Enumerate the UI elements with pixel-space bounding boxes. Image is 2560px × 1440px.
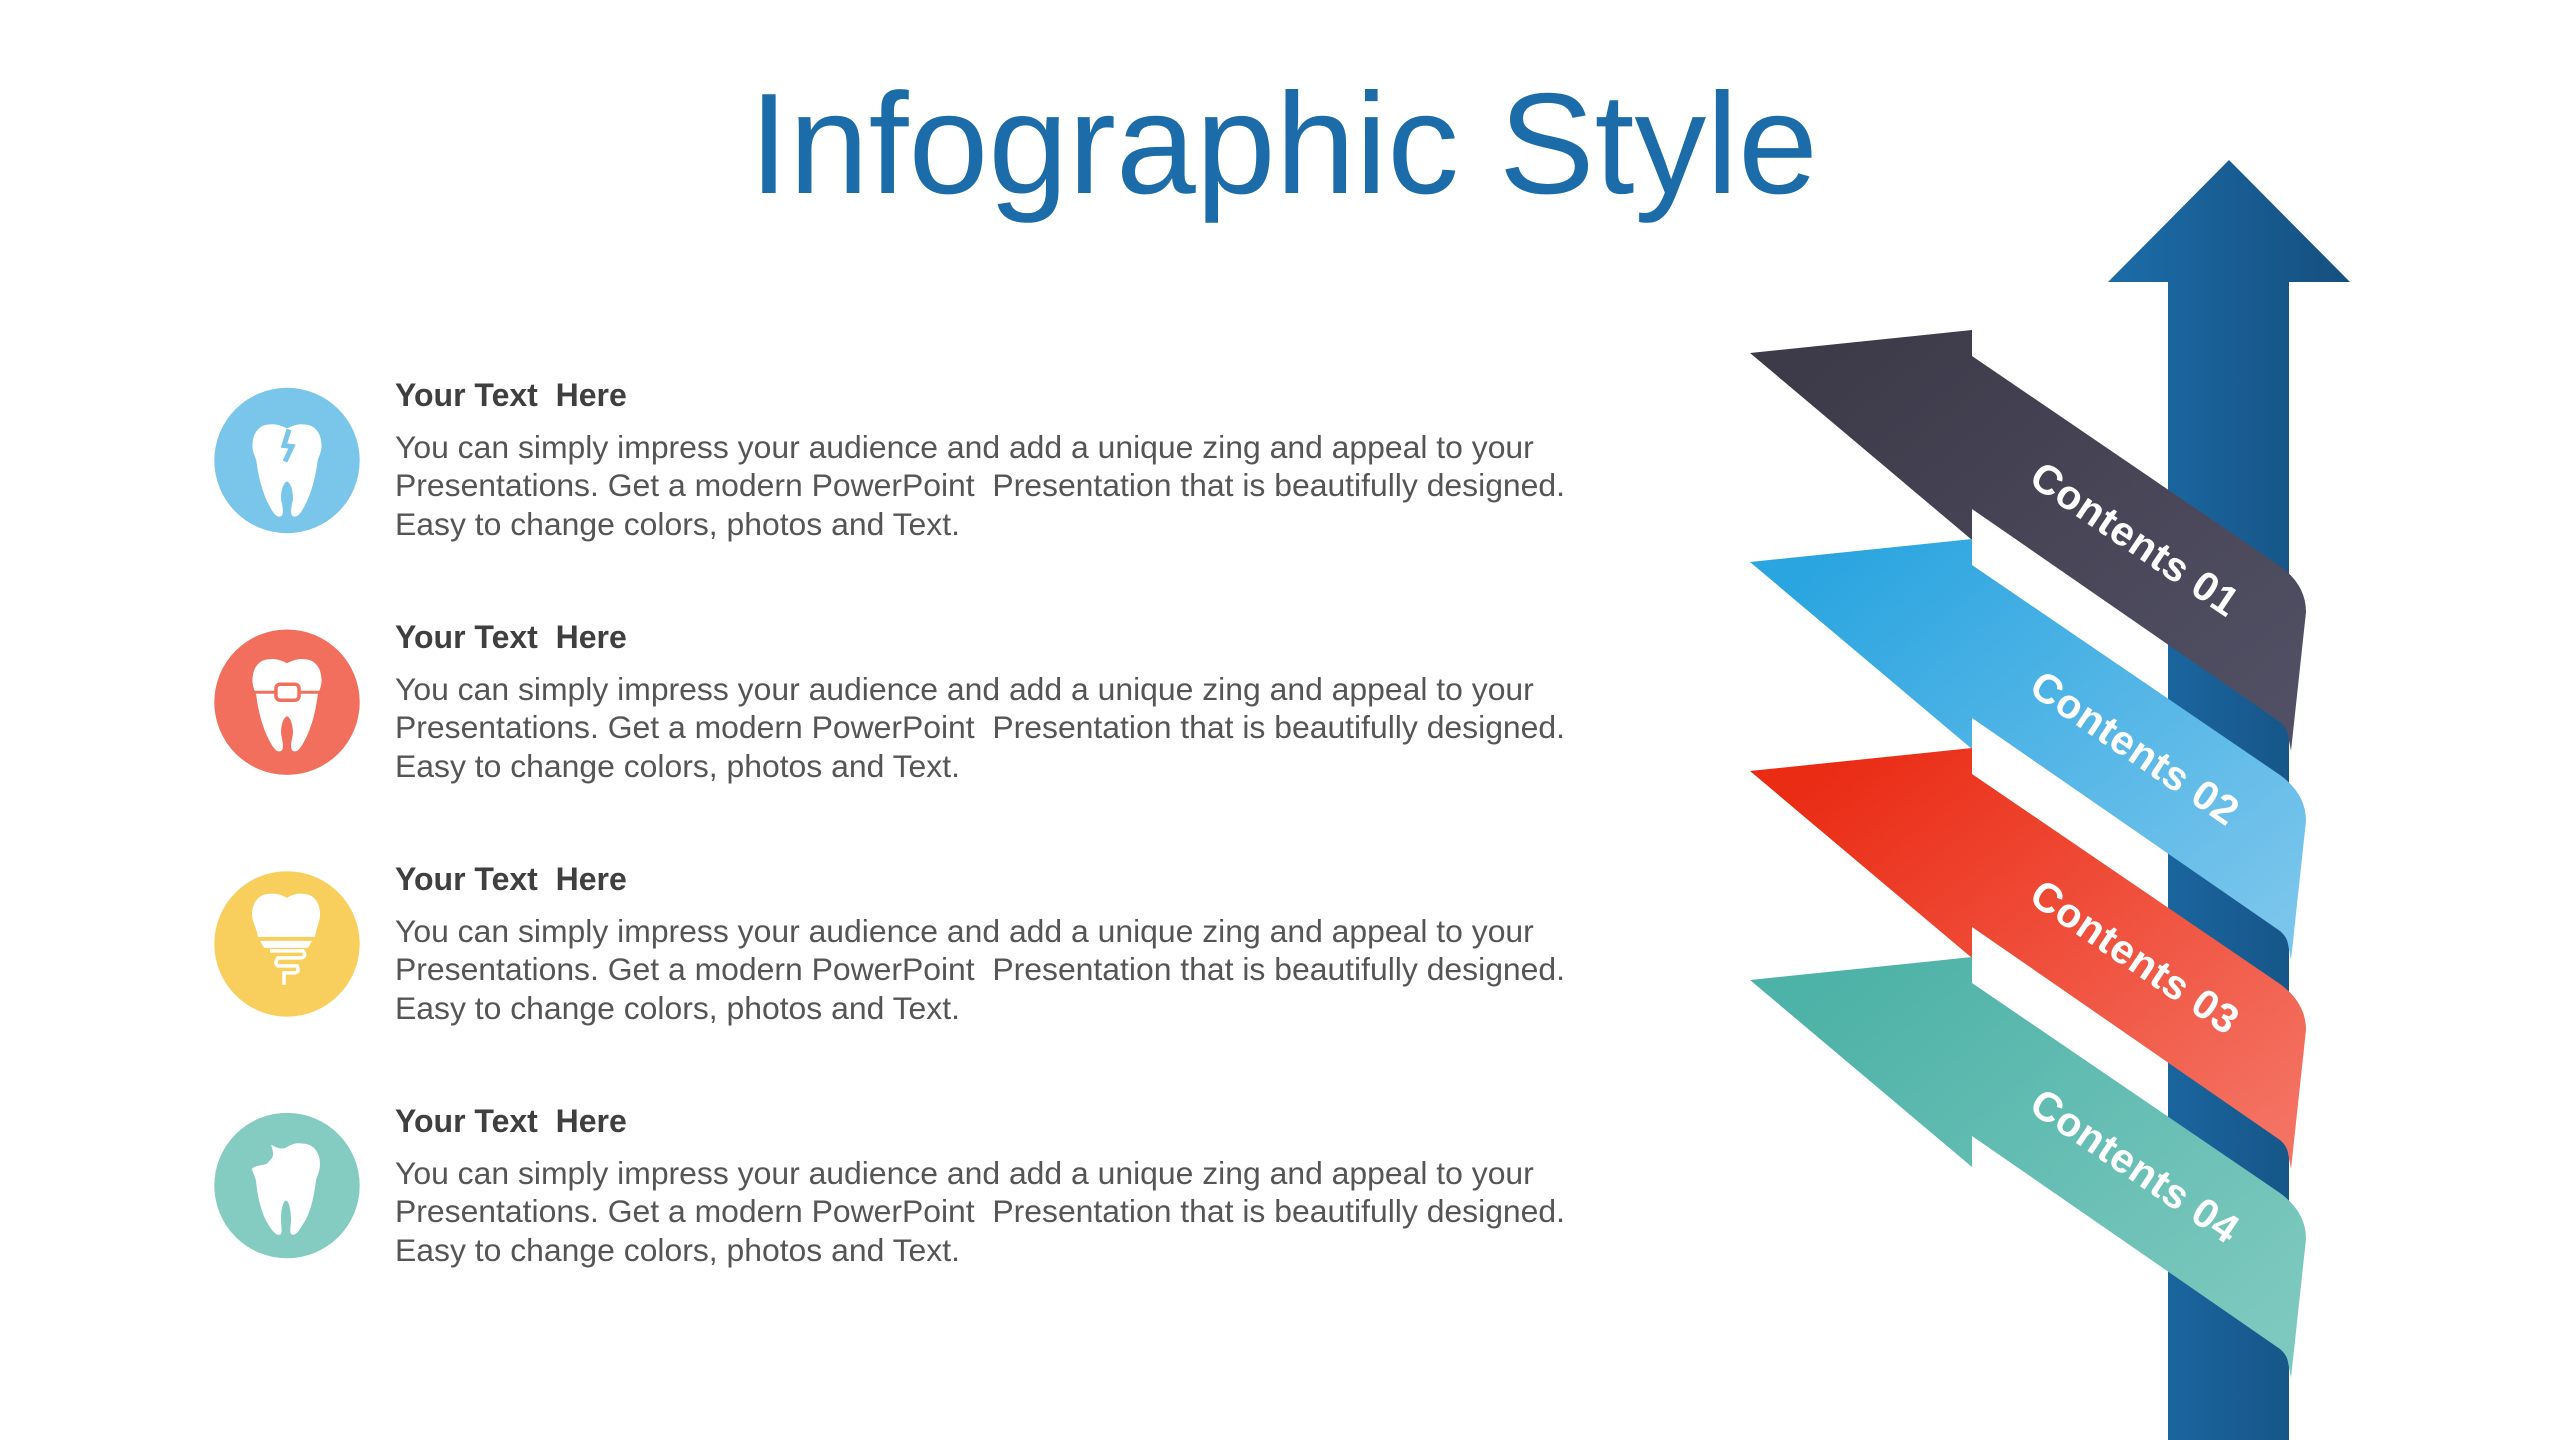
- text block 1: You can simply impress your audience and add a unique zing and appeal to your Presentations. Get a modern PowerPoint Presentation that is beautifully designed. Easy to change colors, photos and Text.: [395, 428, 1565, 542]
- icon: dental implant: [214, 871, 360, 1017]
- ribbon arrow: Contents 01: Contents 01: [2022, 452, 2248, 626]
- text block 1: [395, 377, 1565, 542]
- arrow: main upward arrow: [2108, 160, 2350, 1440]
- title: Infographic Style: [749, 64, 1818, 224]
- text block 1: Your Text Here: [395, 377, 627, 413]
- text block 2: You can simply impress your audience and add a unique zing and appeal to your Presentations. Get a modern PowerPoint Presentation that is beautifully designed. Easy to change colors, photos and Text.: [395, 670, 1565, 784]
- text block 4: Your Text Here: [395, 1103, 627, 1139]
- text block 3: [395, 861, 1565, 1026]
- ribbon arrow: Contents 02: Contents 02: [2022, 661, 2248, 835]
- text block 3: Your Text Here: [395, 861, 627, 897]
- icon: tooth with brace: [214, 630, 360, 775]
- ribbon arrow: Contents 03: [1750, 748, 2306, 1169]
- ribbon arrow: Contents 03: Contents 03: [2022, 870, 2248, 1044]
- text block 2: Your Text Here: [395, 619, 627, 655]
- ribbon arrow: Contents 01: [1750, 330, 2306, 751]
- text block 4: You can simply impress your audience and add a unique zing and appeal to your Presentations. Get a modern PowerPoint Presentation that is beautifully designed. Easy to change colors, photos and Text.: [395, 1154, 1565, 1268]
- text block 2: [395, 619, 1565, 784]
- ribbon arrow: Contents 04: [1750, 957, 2306, 1378]
- text block 3: You can simply impress your audience and add a unique zing and appeal to your Presentations. Get a modern PowerPoint Presentation that is beautifully designed. Easy to change colors, photos and Text.: [395, 912, 1565, 1026]
- icon: chipped tooth: [214, 1113, 360, 1258]
- ribbon arrow: Contents 02: [1750, 539, 2306, 960]
- text block 4: [395, 1103, 1565, 1268]
- icon: cracked tooth: [214, 388, 360, 533]
- ribbon arrow: Contents 04: Contents 04: [2022, 1079, 2248, 1253]
